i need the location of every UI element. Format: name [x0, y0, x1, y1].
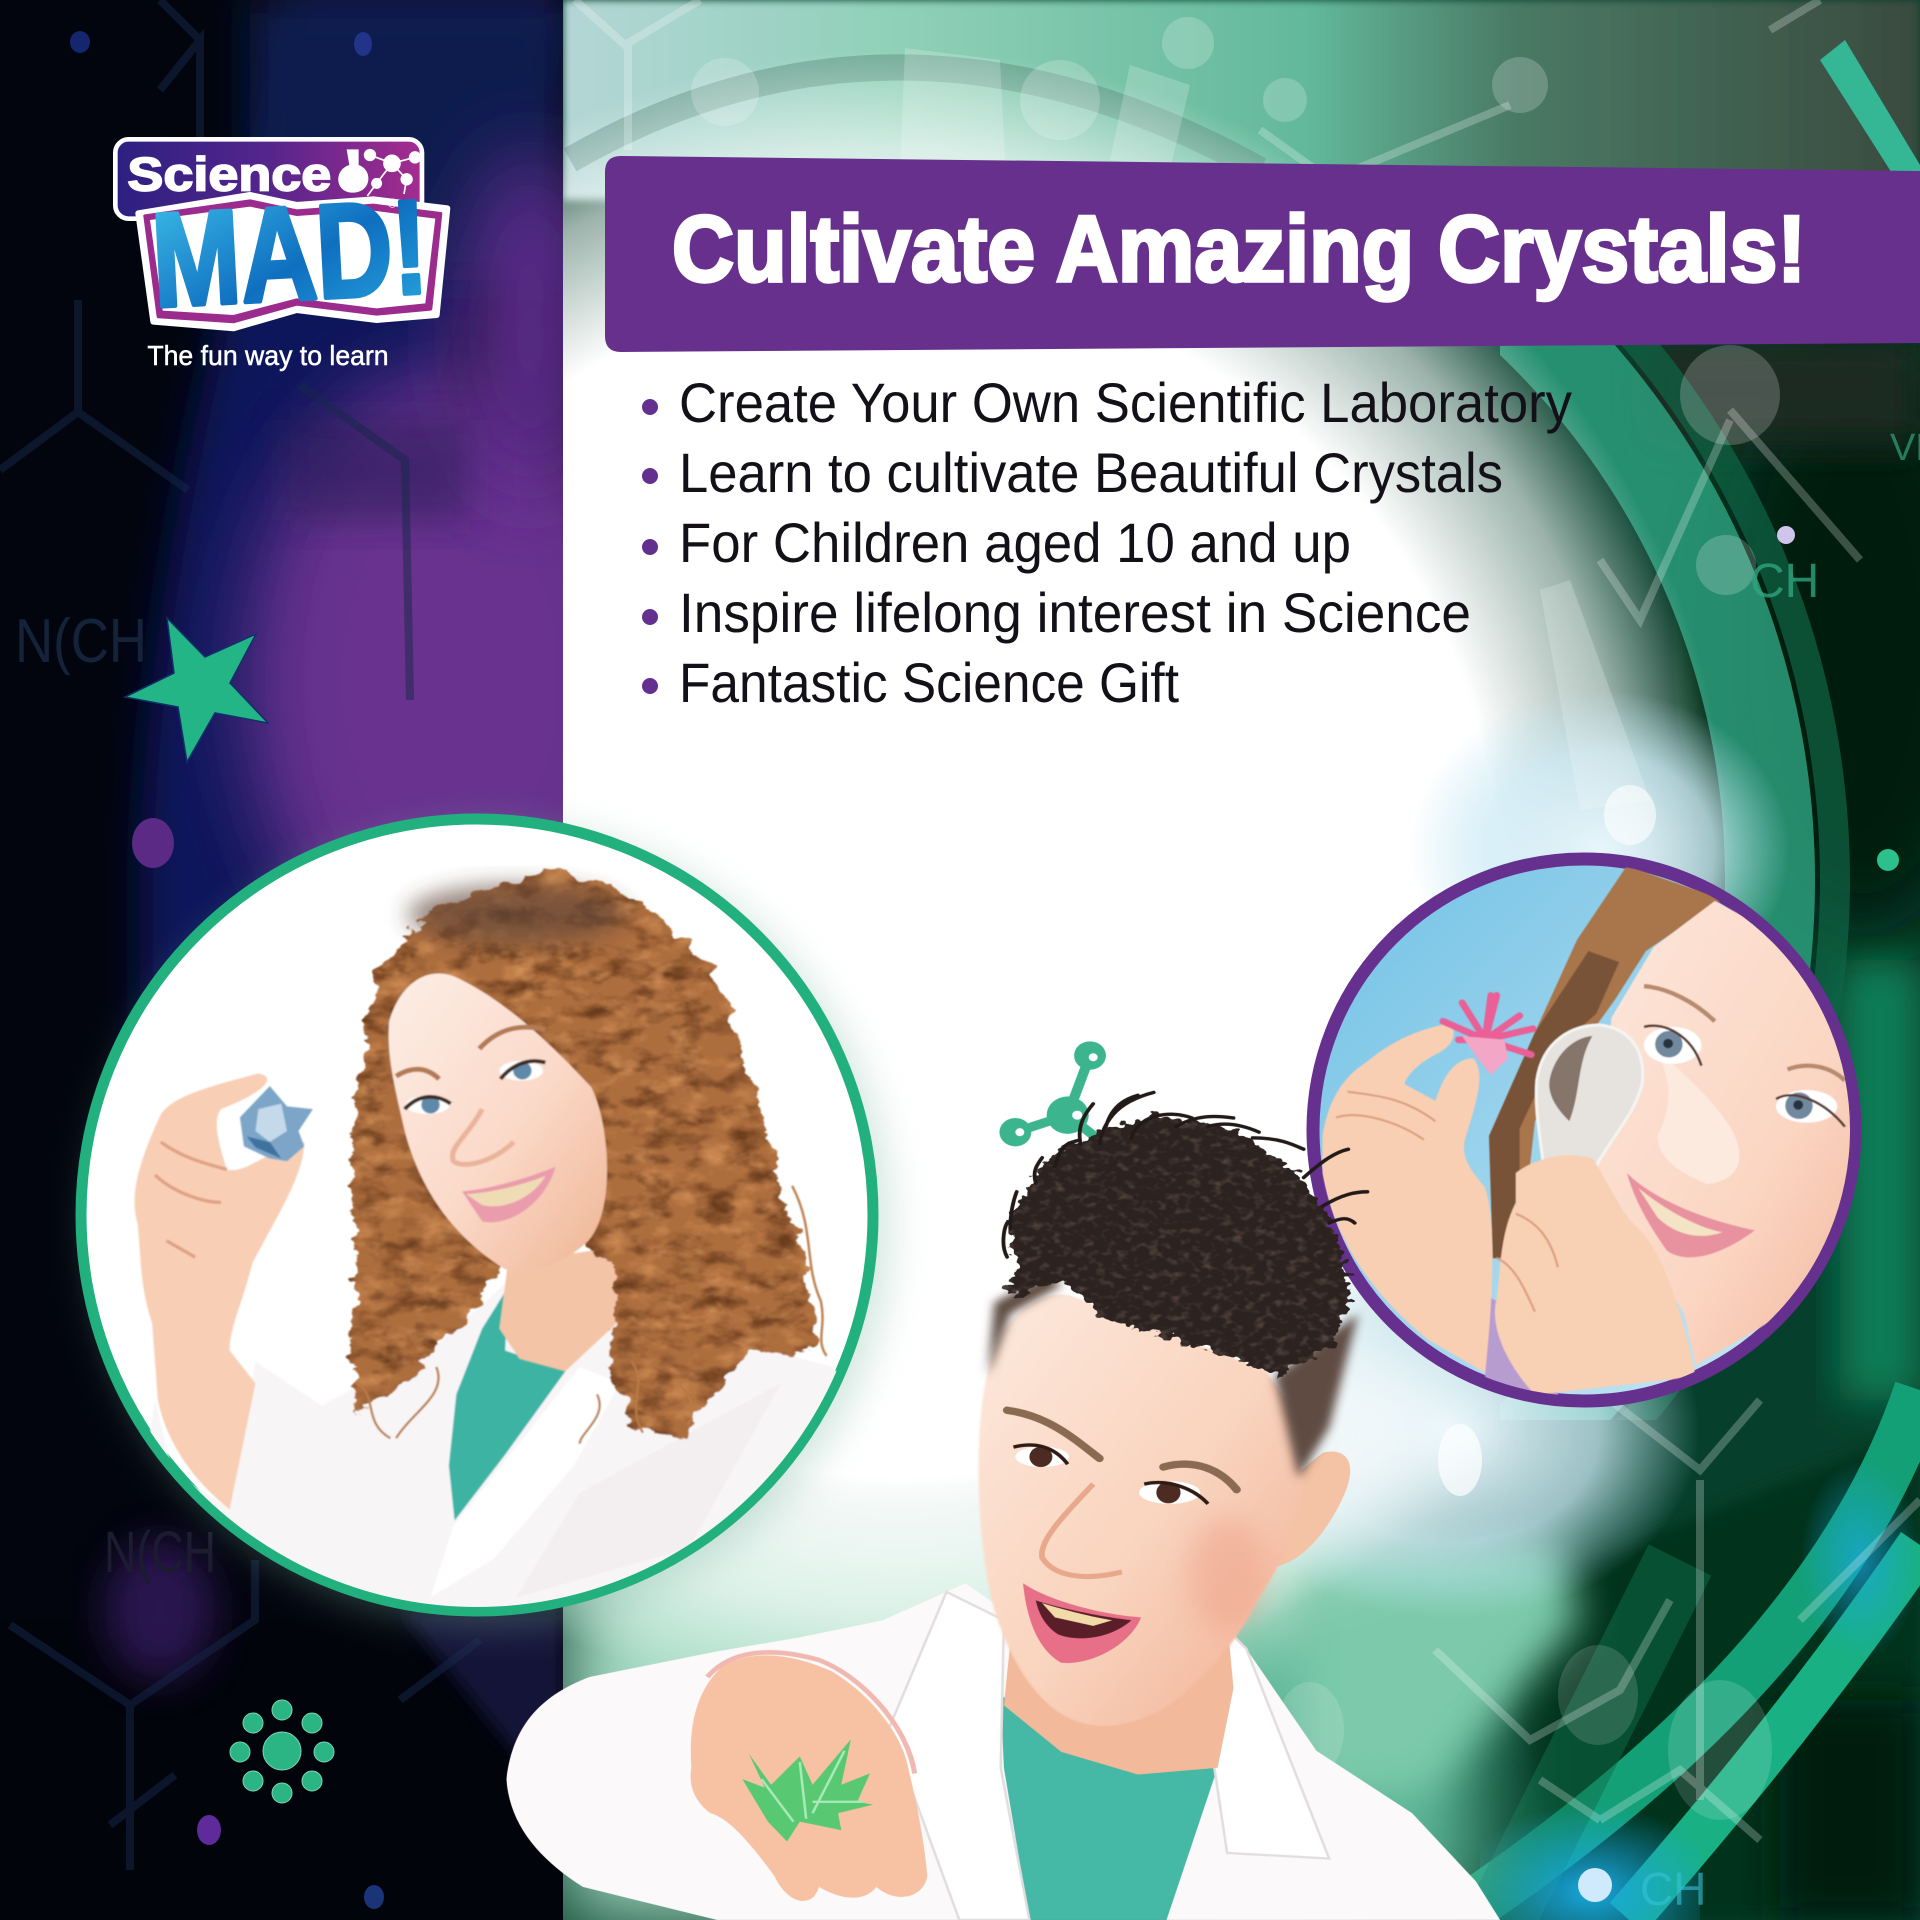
- bright lower right bands: [1480, 1390, 1920, 1920]
- girl lab coat: [149, 1286, 837, 1607]
- boy hair fade: [988, 1274, 1358, 1478]
- boy with green crystal: [506, 1041, 1500, 1920]
- logo icon: flask: [338, 149, 368, 193]
- girl face: [388, 974, 607, 1271]
- pink crystal base: [1462, 1036, 1508, 1075]
- logo word Science: Science: [127, 149, 331, 202]
- title banner: [605, 156, 1920, 352]
- logo word MAD: MAD!: [149, 172, 431, 336]
- background: left dark panel: [0, 0, 563, 1920]
- second girl hair: [1489, 866, 1722, 1258]
- boy face: [978, 1294, 1304, 1726]
- bullet 1: Create Your Own Scientific Laboratory: [679, 371, 1572, 434]
- second girl right hand: [1495, 1155, 1696, 1395]
- photo circle: girl with blue crystal: [81, 819, 895, 1658]
- magnifying glass: [1536, 1025, 1643, 1225]
- girl eyes: [405, 1061, 545, 1114]
- second girl eyes and brows: [1644, 986, 1845, 1127]
- second girl face: [1596, 901, 1864, 1365]
- girl hand and arm: [134, 1073, 304, 1510]
- icon: green star: [125, 618, 268, 762]
- bullet 2: Learn to cultivate Beautiful Crystals: [679, 441, 1503, 504]
- background: right science panel: CH: [1750, 555, 1819, 608]
- girl nose: [452, 1109, 514, 1164]
- second girl purple top: [1485, 1295, 1558, 1410]
- logo white inner outline: [150, 207, 435, 315]
- second girl left hand: [1323, 1023, 1492, 1373]
- girl eyebrows: [396, 1027, 545, 1079]
- boy hand: [691, 1655, 927, 1901]
- boy coat lapels: [889, 1592, 1329, 1920]
- title text: Cultivate Amazing Crystals!: [672, 196, 1806, 301]
- green crystal: [742, 1739, 873, 1842]
- girl curly wisps: [356, 1186, 827, 1444]
- boy lab coat: [506, 1583, 1500, 1920]
- icon: molecule green: [999, 1041, 1130, 1162]
- girl mouth: [462, 1167, 556, 1222]
- boy nose: [1042, 1484, 1122, 1576]
- boy ear: [1262, 1452, 1350, 1568]
- logo blob purple: [145, 201, 441, 322]
- boy eyes: [1013, 1445, 1208, 1504]
- girl hair: [350, 871, 818, 1433]
- blue crystal: [240, 1086, 313, 1161]
- icon: green dots cluster: [230, 1700, 334, 1803]
- girl teal shirt: [449, 1287, 565, 1520]
- logo blob outline: [138, 195, 447, 328]
- bullet 5: Fantastic Science Gift: [679, 651, 1179, 714]
- background: right science panel: [563, 0, 1920, 1920]
- boy cheek shading: [1189, 1518, 1265, 1632]
- background: right science panel: CH: [1640, 1863, 1706, 1915]
- boy mouth: [1023, 1583, 1141, 1663]
- logo: Science MAD: [115, 139, 447, 371]
- bullet 4: Inspire lifelong interest in Science: [679, 581, 1471, 644]
- photo circle: girl with magnifier and pink crystal: [1313, 859, 1864, 1410]
- pink crystal: [1443, 995, 1533, 1055]
- boy shirt: [1001, 1694, 1218, 1920]
- feature bullet list: [642, 371, 1572, 714]
- logo tagline: The fun way to learn: [147, 340, 389, 371]
- girl neck: [499, 1246, 623, 1371]
- logo registered mark: ®: [388, 197, 398, 211]
- boy sleeve cuff outline: [707, 1652, 915, 1773]
- second girl mouth: [1627, 1173, 1755, 1257]
- background: left dark panel: N(CH: [15, 607, 147, 676]
- boy eyebrows: [1007, 1410, 1237, 1490]
- girl hair top shade: [408, 884, 626, 945]
- background: left dark panel: N(CH: [104, 1520, 216, 1585]
- boy neck: [1004, 1620, 1233, 1775]
- logo icon: molecule: [365, 150, 420, 196]
- bullet 3: For Children aged 10 and up: [679, 511, 1351, 574]
- boy hair spikes: [1003, 1092, 1367, 1257]
- logo badge box: [115, 139, 422, 219]
- boy hair: [1004, 1115, 1351, 1376]
